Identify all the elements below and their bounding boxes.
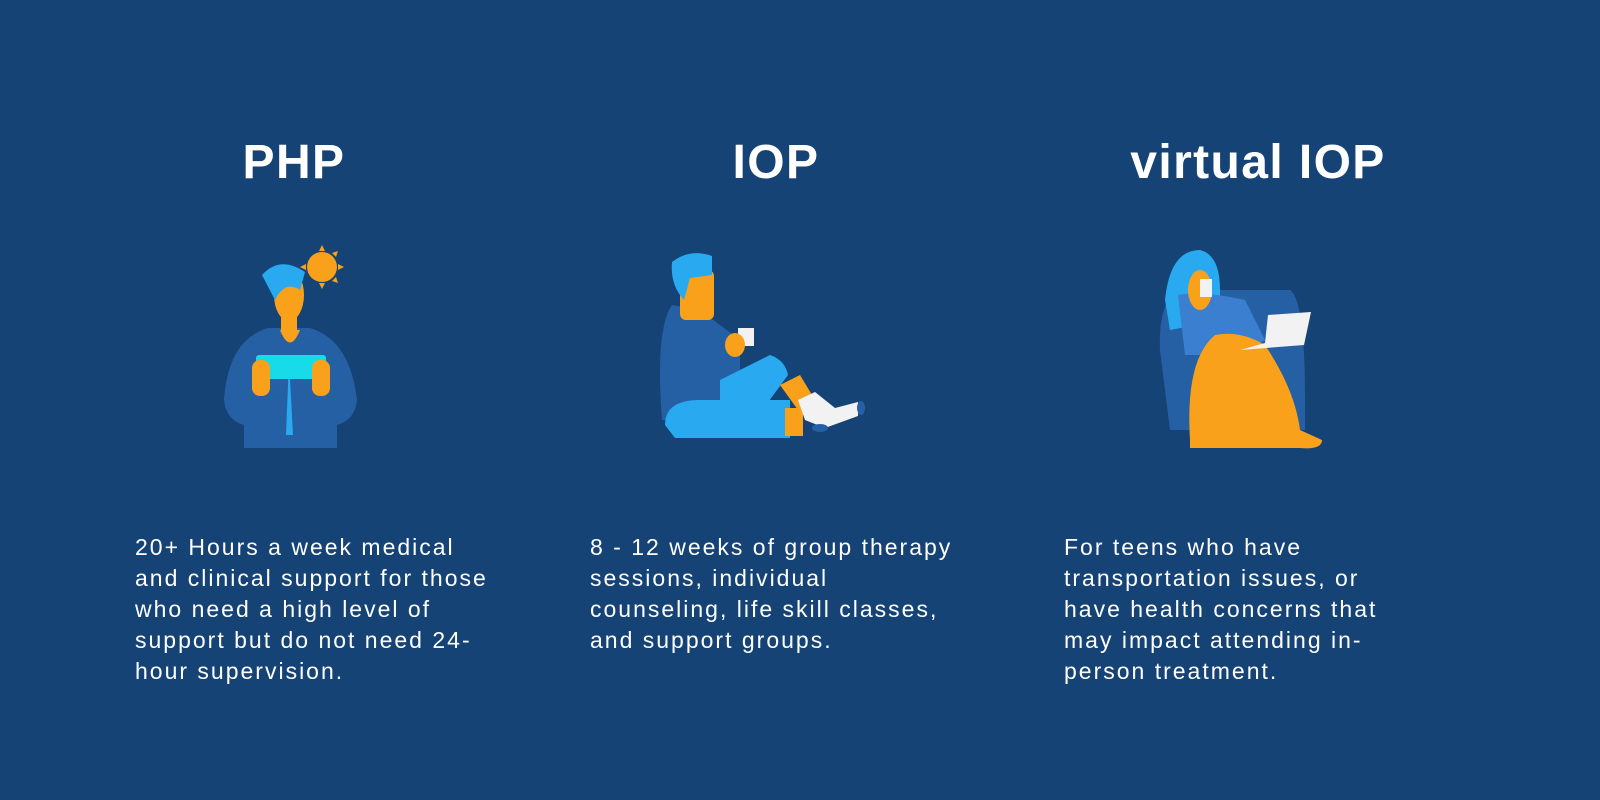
text: virtual IOP description: person treatment. bbox=[1064, 658, 1278, 684]
text: IOP description: counseling, life skill classes, bbox=[590, 596, 938, 622]
text: PHP description: support but do not need 24- bbox=[135, 627, 472, 653]
text: PHP description: and clinical support for those bbox=[135, 565, 488, 591]
text: IOP description: sessions, individual bbox=[590, 565, 828, 591]
icon: IOP person sitting with cup bbox=[660, 253, 865, 438]
title: IOP: IOP bbox=[733, 136, 819, 189]
icon: virtual IOP person with laptop bbox=[1160, 250, 1322, 448]
text: PHP description: hour supervision. bbox=[135, 658, 344, 684]
text: IOP description: and support groups. bbox=[590, 627, 833, 653]
title: virtual IOP: virtual IOP bbox=[1130, 136, 1386, 189]
text: PHP description: who need a high level of bbox=[135, 596, 431, 622]
text: virtual IOP description: For teens who have bbox=[1064, 534, 1302, 560]
text: virtual IOP description: have health concerns that bbox=[1064, 596, 1377, 622]
text: IOP description: 8 - 12 weeks of group therapy bbox=[590, 534, 952, 560]
text: PHP description bbox=[135, 534, 488, 684]
text: PHP description: 20+ Hours a week medical bbox=[135, 534, 455, 560]
text: IOP description bbox=[590, 534, 952, 653]
text: virtual IOP description: transportation issues, or bbox=[1064, 565, 1359, 591]
text: virtual IOP description: may impact attending in- bbox=[1064, 627, 1363, 653]
icon: PHP person with tablet bbox=[224, 245, 357, 448]
title: PHP: PHP bbox=[243, 136, 345, 189]
text: virtual IOP description bbox=[1064, 534, 1377, 684]
